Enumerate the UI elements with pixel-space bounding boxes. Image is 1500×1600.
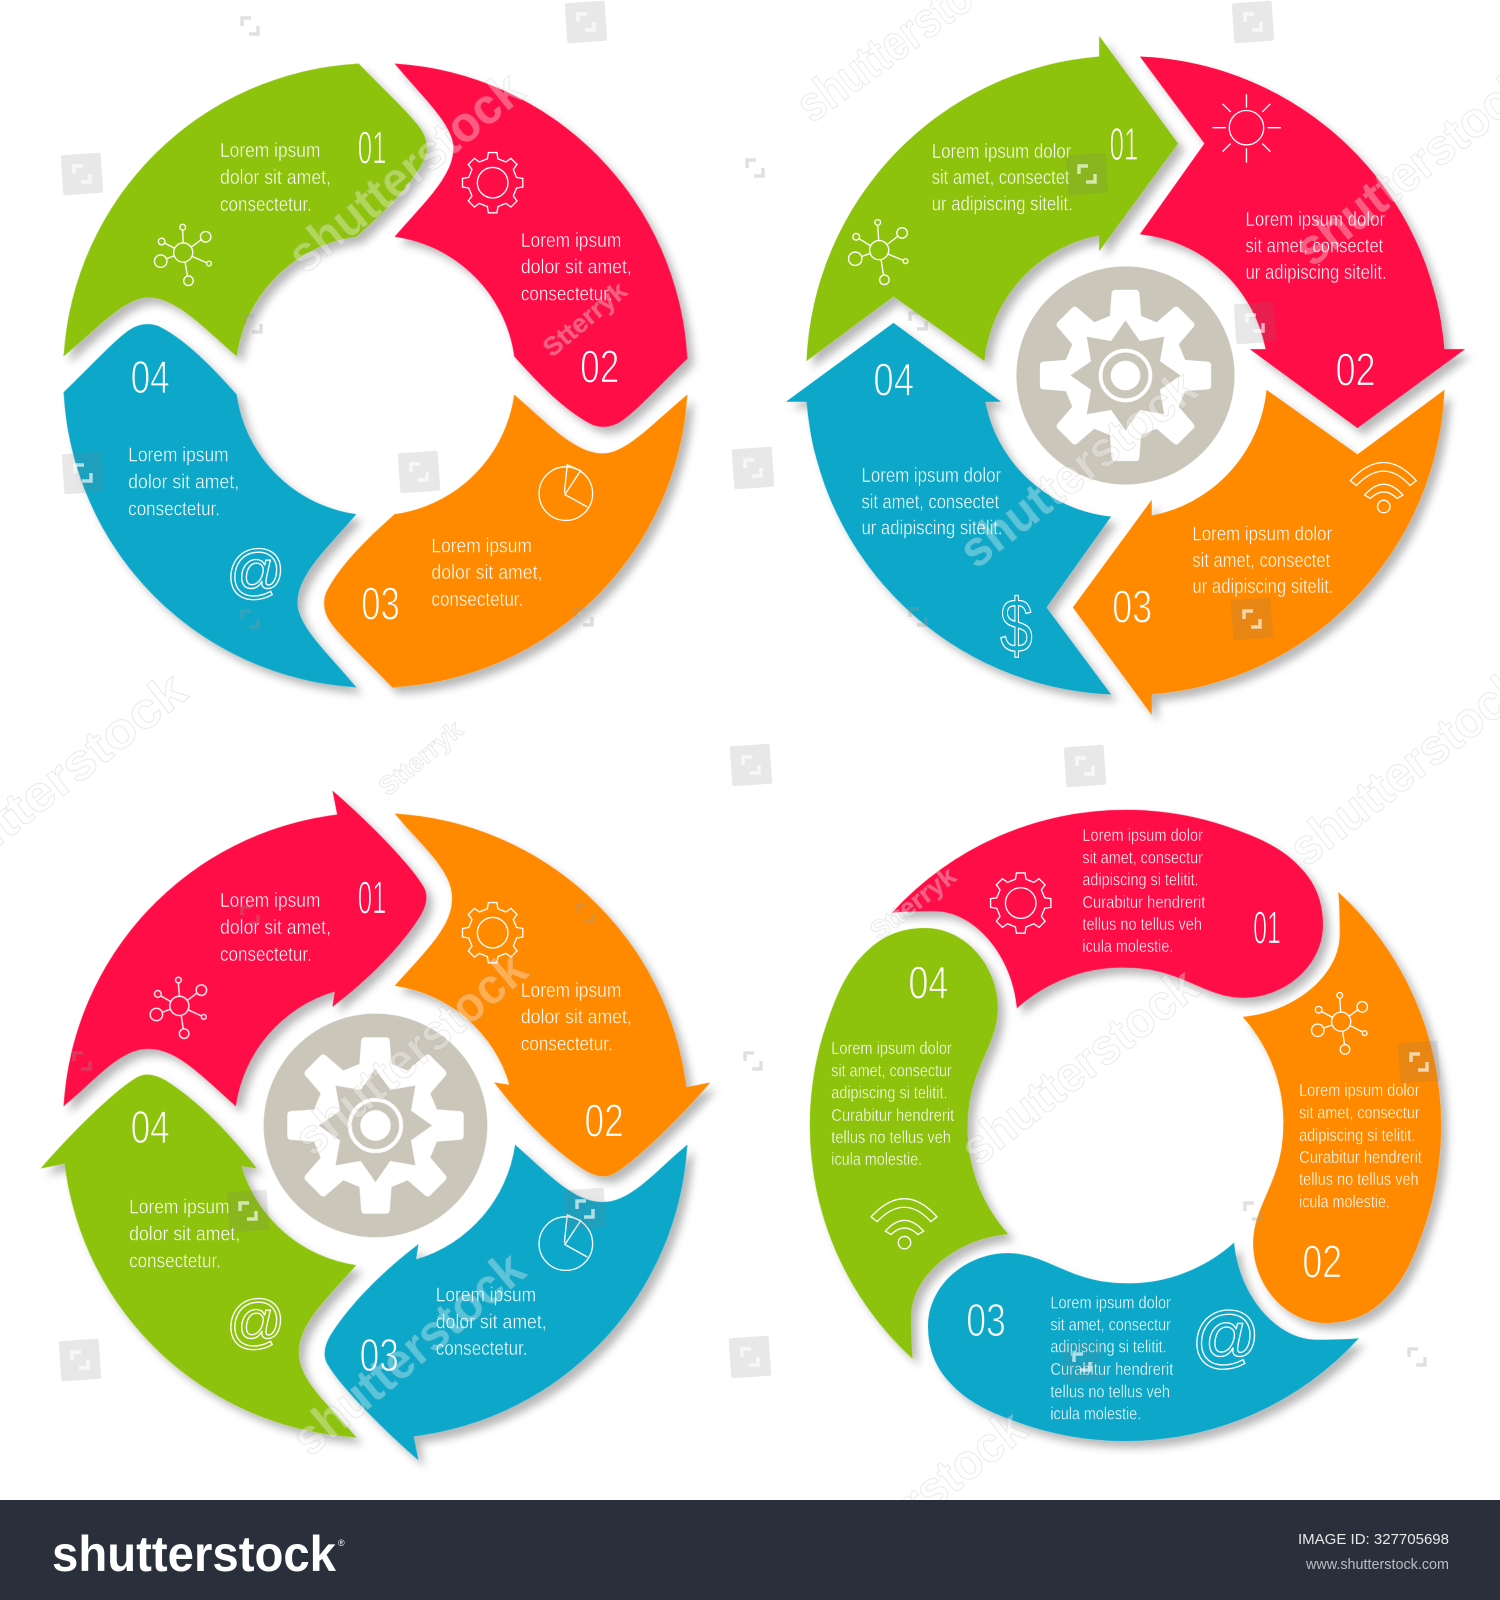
number 01: 01 bbox=[1253, 902, 1281, 954]
arrow 02 orange bbox=[395, 814, 710, 1176]
segment 02 orange bbox=[1243, 892, 1441, 1323]
arrow 04 blue bbox=[786, 323, 1111, 694]
text: red arrow: ur adipiscing sitelit. bbox=[1246, 261, 1387, 284]
number 02: 02 bbox=[1302, 1236, 1342, 1288]
text: orange segment: Curabitur hendrerit bbox=[1299, 1147, 1422, 1167]
watermark overlay: shutterstock bbox=[949, 957, 1208, 1177]
text: orange arrow: Lorem ipsum dolor bbox=[1192, 522, 1332, 545]
text: green arrow bbox=[932, 140, 1073, 215]
center gear bbox=[264, 1014, 487, 1237]
text: blue segment: Lorem ipsum bbox=[128, 444, 229, 467]
number 04: 04 bbox=[131, 351, 170, 403]
text: blue segment bbox=[128, 444, 239, 521]
text: orange segment bbox=[431, 534, 542, 611]
text: blue arrow: sit amet, consectet bbox=[861, 490, 999, 513]
arrow 01 red bbox=[64, 791, 426, 1106]
icon: pie chart bbox=[539, 465, 593, 520]
arrow 03 orange bbox=[1073, 390, 1444, 715]
text: green arrow: consectetur. bbox=[129, 1250, 221, 1273]
number 04: 04 bbox=[873, 354, 914, 406]
blob segments bbox=[810, 810, 1441, 1441]
text: blue arrow: Lorem ipsum dolor bbox=[861, 464, 1001, 487]
panel: arrow cycle diagram top right bbox=[786, 36, 1465, 715]
text: blue segment: consectetur. bbox=[128, 498, 220, 521]
text: green segment: Lorem ipsum dolor bbox=[831, 1038, 952, 1058]
text: green arrow: ur adipiscing sitelit. bbox=[932, 192, 1073, 215]
number 03: 03 bbox=[1112, 581, 1152, 633]
icon: at sign: @ bbox=[226, 1288, 286, 1355]
icon: wifi bbox=[871, 1199, 937, 1249]
watermark overlay: Stterryk bbox=[373, 714, 469, 802]
icon: at sign: @ bbox=[1191, 1298, 1260, 1375]
icon: wifi bbox=[1350, 463, 1416, 513]
text: green arrow: sit amet, consectet bbox=[932, 166, 1070, 189]
number 01: 01 bbox=[358, 122, 386, 174]
text: red arrow: sit amet, consectet bbox=[1246, 235, 1383, 258]
icon: pie chart bbox=[539, 1215, 593, 1270]
text: blue arrow: ur adipiscing sitelit. bbox=[861, 517, 1003, 540]
text: green segment: Curabitur hendrerit bbox=[831, 1105, 954, 1125]
number 03: 03 bbox=[361, 577, 400, 629]
number 04: 04 bbox=[131, 1101, 170, 1153]
segment 01 red bbox=[892, 810, 1323, 1008]
text: orange segment: dolor sit amet, bbox=[431, 561, 542, 584]
watermark overlay: shutterstock bbox=[948, 359, 1207, 579]
text: orange arrow bbox=[521, 979, 632, 1055]
curved arrow segments bbox=[41, 791, 710, 1460]
watermark overlay: Stterryk bbox=[864, 860, 962, 946]
text: blue segment: tellus no tellus veh bbox=[1050, 1382, 1170, 1402]
panel: rounded cycle diagram top left bbox=[64, 64, 687, 687]
text: orange segment bbox=[1299, 1080, 1422, 1211]
text: blue arrow bbox=[861, 464, 1003, 540]
number 03: 03 bbox=[966, 1294, 1006, 1346]
text: red segment: sit amet, consectur bbox=[1082, 847, 1203, 867]
text: green segment: tellus no tellus veh bbox=[831, 1127, 951, 1147]
text: red segment: tellus no tellus veh bbox=[1082, 914, 1202, 934]
icon: gear bbox=[463, 153, 523, 213]
arrow 01 green bbox=[806, 36, 1178, 361]
text: blue segment: Lorem ipsum dolor bbox=[1050, 1293, 1171, 1313]
text: green arrow: Lorem ipsum dolor bbox=[932, 140, 1072, 163]
text: green segment: sit amet, consectur bbox=[831, 1061, 952, 1081]
text: red arrow bbox=[220, 889, 331, 966]
footer bar bbox=[0, 1500, 1500, 1600]
text: orange segment: Lorem ipsum bbox=[431, 534, 532, 557]
text: blue arrow: Lorem ipsum bbox=[436, 1283, 536, 1306]
text: orange arrow: ur adipiscing sitelit. bbox=[1192, 575, 1334, 598]
icon: at sign: @ bbox=[226, 538, 286, 605]
arrow 02 red bbox=[1140, 56, 1465, 428]
text: green arrow bbox=[129, 1195, 240, 1273]
number 01: 01 bbox=[1110, 118, 1138, 170]
text: blue segment: dolor sit amet, bbox=[128, 470, 239, 493]
number 03: 03 bbox=[360, 1329, 399, 1381]
icon: gear bbox=[463, 903, 523, 963]
text: orange segment: adipiscing si telitit. bbox=[1299, 1125, 1415, 1145]
text: green arrow: dolor sit amet, bbox=[129, 1223, 240, 1246]
text: blue segment: adipiscing si telitit. bbox=[1050, 1337, 1167, 1357]
text: orange arrow: consectetur. bbox=[521, 1032, 613, 1055]
text: red arrow: Lorem ipsum dolor bbox=[1246, 208, 1385, 231]
text: red arrow: consectetur. bbox=[220, 943, 312, 966]
text: green arrow: Lorem ipsum bbox=[129, 1195, 230, 1218]
icon: network bbox=[154, 224, 211, 286]
text: blue segment: Curabitur hendrerit bbox=[1050, 1359, 1173, 1379]
text: blue arrow: dolor sit amet, bbox=[436, 1310, 547, 1333]
text: red arrow: Lorem ipsum bbox=[220, 889, 320, 912]
text: orange segment: tellus no tellus veh bbox=[1299, 1169, 1419, 1189]
text: orange arrow bbox=[1192, 522, 1334, 598]
footer logo: shutterstock bbox=[52, 1526, 336, 1582]
number 02: 02 bbox=[1335, 344, 1376, 396]
text: red segment: consectetur. bbox=[521, 282, 613, 305]
segment 03 orange bbox=[324, 395, 687, 687]
center gear bbox=[1016, 266, 1235, 485]
text: green segment bbox=[831, 1038, 954, 1169]
icon: gear bbox=[991, 873, 1051, 933]
text: orange arrow: sit amet, consectet bbox=[1192, 549, 1330, 572]
text: red segment: icula molestie. bbox=[1082, 936, 1173, 956]
text: orange arrow: dolor sit amet, bbox=[521, 1006, 632, 1029]
segment 04 green bbox=[810, 928, 1008, 1359]
text: blue arrow: consectetur. bbox=[436, 1337, 528, 1360]
watermark overlay: shutterstock bbox=[283, 940, 538, 1166]
text: green segment: adipiscing si telitit. bbox=[831, 1083, 948, 1103]
text: red segment bbox=[521, 229, 632, 305]
segment 02 red bbox=[395, 64, 687, 427]
text: red arrow bbox=[1246, 208, 1387, 284]
panel: curved arrow diagram bottom left bbox=[41, 791, 710, 1460]
text: red segment: Lorem ipsum bbox=[521, 229, 621, 252]
text: orange segment: icula molestie. bbox=[1299, 1191, 1390, 1211]
number 02: 02 bbox=[584, 1094, 624, 1146]
text: green segment: icula molestie. bbox=[831, 1149, 922, 1169]
text: blue segment: icula molestie. bbox=[1050, 1404, 1141, 1424]
icon: network bbox=[150, 977, 207, 1038]
segment 03 blue bbox=[928, 1243, 1359, 1441]
text: orange segment: sit amet, consectur bbox=[1299, 1102, 1420, 1122]
text: red segment: adipiscing si telitit. bbox=[1082, 869, 1199, 889]
text: green segment: dolor sit amet, bbox=[220, 166, 331, 189]
arrow segments bbox=[786, 36, 1465, 715]
text: red arrow: dolor sit amet, bbox=[220, 916, 331, 939]
text: red segment bbox=[1082, 825, 1205, 956]
text: orange segment: Lorem ipsum dolor bbox=[1299, 1080, 1420, 1100]
text: green segment: Lorem ipsum bbox=[220, 139, 320, 162]
icon: dollar sign: $ bbox=[1000, 584, 1033, 669]
text: orange segment: consectetur. bbox=[431, 588, 523, 611]
website: www.shutterstock.com bbox=[1305, 1556, 1449, 1573]
watermark overlay: shutterstock bbox=[281, 1240, 536, 1466]
text: green segment bbox=[220, 139, 331, 216]
text: red segment: dolor sit amet, bbox=[521, 256, 632, 279]
text: blue arrow bbox=[436, 1283, 547, 1360]
text: red segment: Lorem ipsum dolor bbox=[1082, 825, 1203, 845]
text: orange arrow: Lorem ipsum bbox=[521, 979, 621, 1002]
watermark overlay: Stterryk bbox=[537, 275, 633, 363]
text: blue segment bbox=[1050, 1293, 1173, 1424]
icon: network bbox=[1312, 992, 1367, 1054]
number 02: 02 bbox=[580, 341, 619, 393]
arrow 04 green bbox=[41, 1075, 356, 1437]
panel: blob cycle diagram bottom right bbox=[810, 810, 1441, 1441]
number 04: 04 bbox=[908, 957, 948, 1009]
watermark overlay: shutterstock bbox=[277, 61, 534, 284]
text: blue segment: sit amet, consectur bbox=[1050, 1315, 1171, 1335]
segment 01 green bbox=[64, 64, 427, 356]
text: red segment: Curabitur hendrerit bbox=[1082, 892, 1205, 912]
number 01: 01 bbox=[358, 872, 386, 924]
text: green segment: consectetur. bbox=[220, 193, 312, 216]
icon: sun bbox=[1213, 94, 1281, 163]
ring segments bbox=[64, 64, 687, 687]
registered mark: ® bbox=[338, 1538, 345, 1548]
arrow 03 blue bbox=[325, 1145, 687, 1460]
icon: network bbox=[849, 220, 908, 285]
image id: IMAGE ID: 327705698 bbox=[1298, 1531, 1449, 1548]
segment 04 blue bbox=[64, 324, 356, 687]
